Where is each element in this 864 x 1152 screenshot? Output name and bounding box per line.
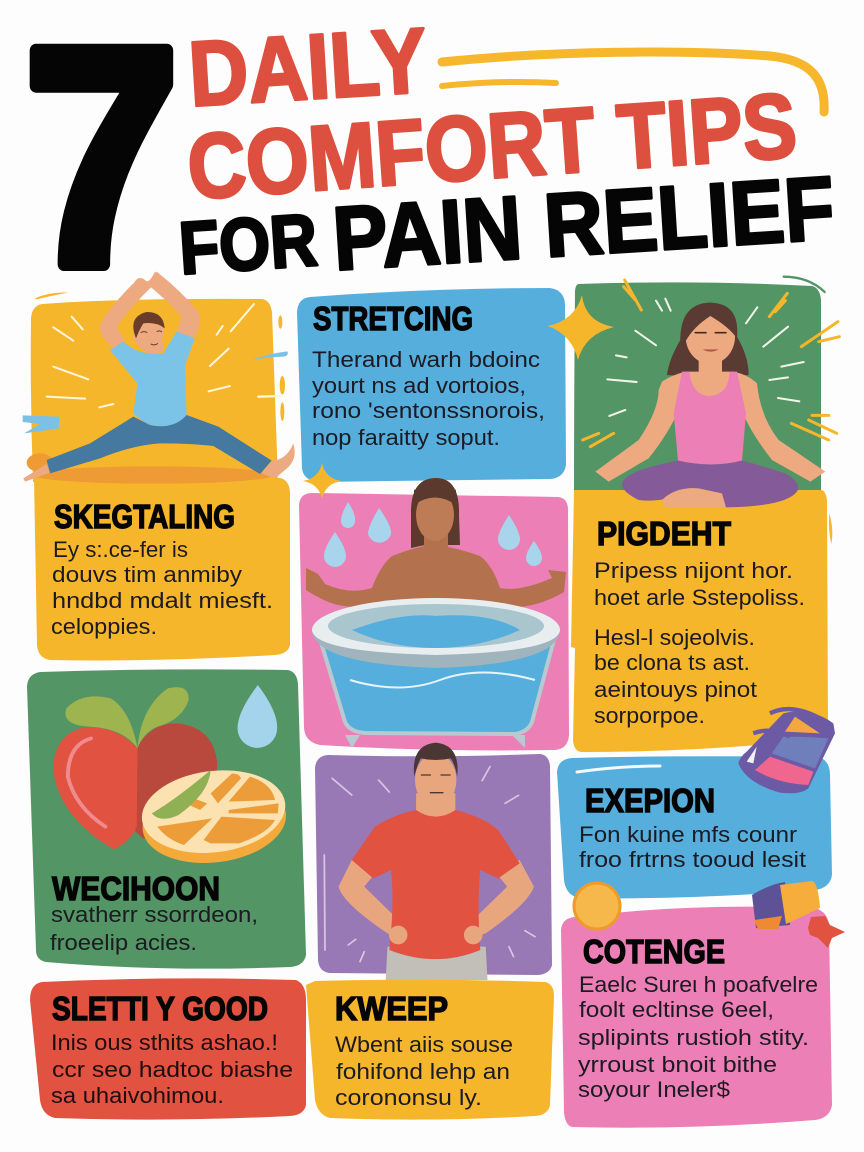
panel background — [571, 490, 828, 752]
title line: for: FOR — [177, 198, 320, 290]
body text: froo frtrns tooud lesit — [579, 847, 806, 872]
body text: Ey s:.ce-fer is — [53, 537, 188, 562]
body text: Fon kuine mfs counr — [579, 822, 797, 847]
body text — [579, 822, 806, 872]
heading: EXEPION — [585, 782, 715, 819]
body text: douvs tim anmiby — [52, 562, 242, 587]
figure: woman meditating — [583, 277, 839, 544]
panel background — [306, 980, 554, 1120]
title line: daily: DAILY — [186, 10, 430, 126]
body text: Therand warh bdoinc — [312, 347, 540, 372]
body text: froeelip acies. — [50, 930, 197, 955]
body text: Hesl-l sojeolvis. — [594, 625, 755, 650]
panel: sletti y good — [30, 978, 306, 1120]
body text: corononsu ly. — [335, 1085, 482, 1110]
body text: hoet arle Sstepoliss. — [594, 585, 805, 610]
heading: KWEEP — [335, 990, 448, 1027]
panel: skegtaling — [34, 478, 290, 660]
figure: man stretching in a split — [23, 272, 295, 484]
body text — [335, 1032, 513, 1110]
body text: rono 'sentonssnorois, — [312, 398, 545, 423]
sparkle star — [303, 463, 341, 499]
panel: meditation figure — [548, 277, 839, 752]
body text: ccr seo hadtoc biashe — [52, 1057, 293, 1082]
figure: standing man in red shirt — [324, 743, 535, 980]
body text — [312, 347, 545, 450]
body text: aeintouys pinot — [594, 677, 757, 702]
body text — [578, 972, 818, 1102]
body text: fohifond lehp an — [336, 1059, 510, 1084]
body text: sa uhaivohimou. — [51, 1083, 224, 1108]
panel background — [315, 754, 552, 975]
panel: stretcing — [297, 288, 566, 482]
body text: nop faraitty soput. — [312, 425, 500, 450]
body text: foolt ecltinse 6eel, — [579, 997, 774, 1022]
body text: Inis ous sthits ashao.! — [51, 1030, 278, 1055]
body text: Pripess nijont hor. — [594, 558, 793, 583]
panel background: green — [574, 282, 821, 492]
panel background — [34, 478, 290, 660]
panel: kweep — [306, 980, 554, 1120]
title line: comfort tips: COMFORT TIPS — [184, 75, 800, 219]
heading: PIGDEHT — [597, 515, 731, 552]
panel: wecihoon — [27, 669, 306, 969]
icon: flip-flop bag — [738, 709, 835, 793]
body text: sorporpoe. — [594, 703, 705, 728]
icon: gold coin — [574, 883, 620, 929]
panel: man with hands on hips — [315, 743, 552, 980]
panel background — [299, 493, 569, 750]
panel: stretching figure — [23, 272, 295, 660]
panel background — [27, 669, 306, 969]
body text: Wbent aiis souse — [335, 1032, 513, 1057]
panel background — [30, 978, 306, 1120]
panel: soaking in the bath — [299, 463, 569, 750]
title — [24, 0, 837, 330]
heading: SLETTI Y GOOD — [52, 990, 268, 1027]
body text: yourt ns ad vortoios, — [312, 373, 526, 398]
body text — [51, 537, 273, 639]
panel: pigdeht — [571, 490, 828, 752]
body text — [50, 902, 258, 955]
icon: toolbox — [752, 881, 820, 929]
panel background — [297, 288, 566, 482]
body text: be clona ts ast. — [594, 650, 750, 675]
heading: WECIHOON — [52, 870, 220, 907]
body text: celoppies. — [51, 614, 157, 639]
panel: cotenge — [561, 881, 845, 1128]
panel: exepion — [557, 756, 832, 898]
icon: red star — [808, 916, 845, 948]
water drops — [324, 502, 542, 567]
title swoosh underline — [442, 52, 824, 112]
sparkle star — [548, 295, 614, 360]
panel background — [561, 907, 832, 1128]
body text: soyour Ineler$ — [578, 1077, 730, 1102]
body text: splipints rustioh stity. — [578, 1025, 809, 1050]
figure: person in bathtub — [306, 478, 566, 748]
body text: svatherr ssorrdeon, — [51, 902, 258, 927]
body text: yrroust bnoit bithe — [578, 1052, 777, 1077]
heading: COTENGE — [583, 933, 725, 970]
body text: Eaelc Sureι h poafvelre — [579, 972, 818, 997]
panel background: yellow top — [31, 299, 278, 482]
heading: SKEGTALING — [54, 498, 235, 535]
body text — [594, 558, 805, 728]
panel background — [557, 756, 832, 898]
heading: STRETCING — [313, 300, 473, 337]
body text — [51, 1030, 293, 1108]
body text: hndbd mdalt miesft. — [52, 588, 273, 613]
illustration: heart fruit, citrus slice and water drop — [53, 685, 292, 871]
